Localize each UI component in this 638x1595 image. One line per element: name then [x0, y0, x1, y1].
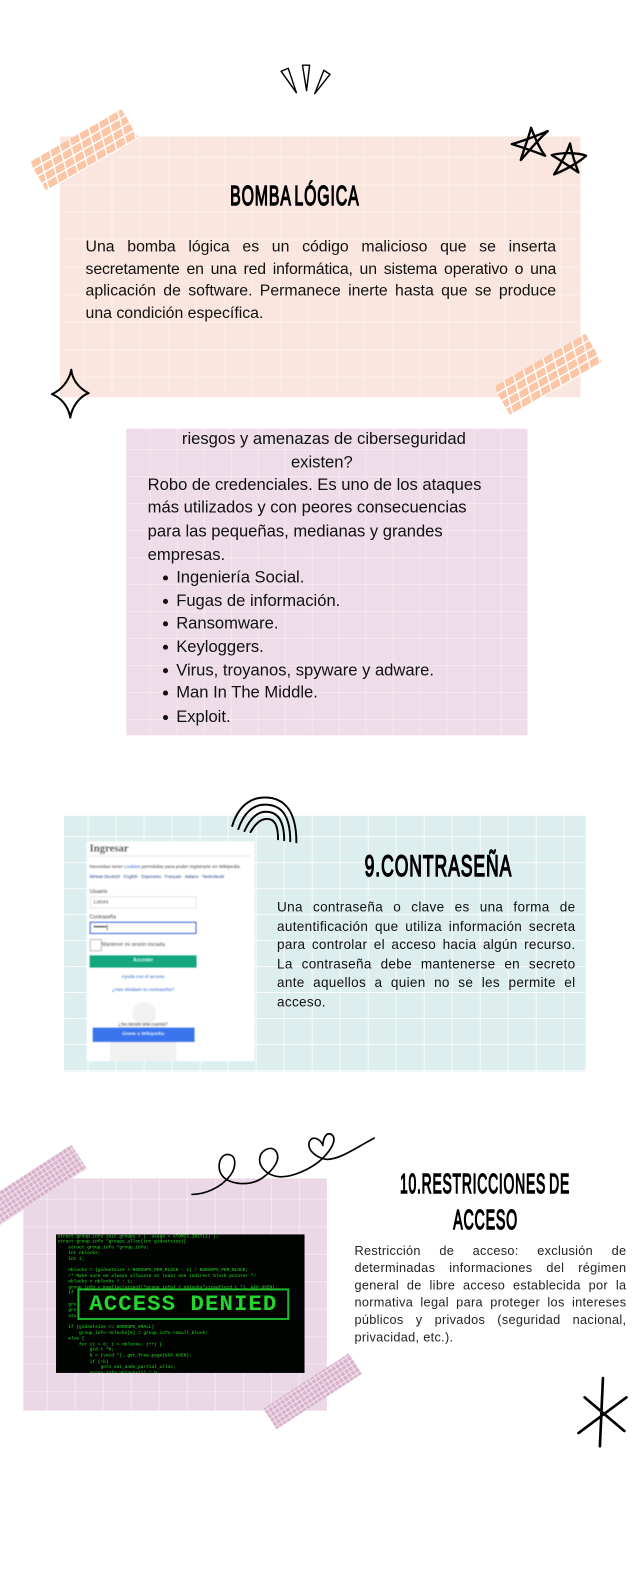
- image: wikipedia login screenshot: Acceder: [133, 957, 153, 964]
- image: wikipedia login screenshot: Ayuda con el acceso: [122, 974, 165, 979]
- text: restricciones description: Restricción de acceso: exclusión de: [354, 1243, 626, 1257]
- image: wikipedia login screenshot: Usuario: [90, 889, 107, 895]
- text: riesgos list: Ransomware.: [176, 614, 279, 632]
- icon: two stars: [510, 126, 588, 176]
- icon: four-point sparkle: [50, 368, 90, 419]
- image: wikipedia login screenshot: ¿No tienes una cuenta?: [118, 1022, 168, 1027]
- text: riesgos list: Keyloggers.: [176, 637, 264, 655]
- text: riesgos list: existen?: [291, 453, 353, 471]
- heading: 9.contraseña: 9.CONTRASEÑA: [365, 849, 512, 883]
- text: restricciones description: general de libre acceso establecida por la: [354, 1278, 626, 1292]
- image: wikipedia login screenshot: Mirwas Deutsch · English · Esperanto · Français · Italiano · Nederlands: [90, 874, 224, 879]
- image: wikipedia login screenshot: [87, 841, 255, 1061]
- panel: contraseña: [64, 816, 586, 1071]
- text: riesgos list: para las pequeñas, medianas y grandes: [148, 522, 443, 540]
- image: wikipedia login screenshot: Contraseña: [90, 914, 116, 920]
- panel: restricciones de acceso: [23, 1178, 327, 1411]
- code background text: struct group_info init_groups = { .usage = ATOMIC_INIT(2) }; struct group_info *groups_alloc(int gidsetsize){ struct group_info *group_info; int nblocks; int i; nblocks = (gidsetsize + NGROUPS_PER_BLOCK - 1) / NGROUPS_PER_BLOCK; /* Make sure we always allocate at least one indirect block pointer */ nblocks = nblocks ? : 1; group_info = kmalloc(sizeof(*group_info) + nblocks*sizeof(gid_t *), GFP_USER); if gro gro ato if (gidsetsize <= NGROUPS_SMALL) group_info->blocks[0] = group_info->small_block; else { for (i = 0; i < nblocks; i++) { gid_t *b; b = (void *)__get_free_page(GFP_USER); if (!b) goto out_undo_partial_alloc; group_info->blocks[i] = b;: [58, 1234, 278, 1373]
- text: bomba lógica description: aplicación de software. Permanece inerte hasta que se produce: [86, 283, 556, 300]
- text: riesgos list: empresas.: [148, 545, 225, 564]
- text: contraseña description: Una contraseña o clave es una forma de: [277, 899, 575, 915]
- panel: bomba lógica: [60, 136, 581, 397]
- image: wikipedia login screenshot: ¿Has olvidado tu contraseña?: [112, 987, 174, 992]
- access denied banner: ACCESS DENIED: [89, 1291, 277, 1317]
- text: contraseña description: para controlar el acceso hacia algún recurso.: [277, 937, 575, 952]
- heading: 10.restricciones de acceso: ACCESO: [453, 1204, 518, 1235]
- image: wikipedia login screenshot: Lstcex: [94, 899, 108, 905]
- image: wikipedia login screenshot: Únete a Wikipedia: [122, 1032, 164, 1037]
- text: bomba lógica description: Una bomba lógica es un código malicioso que se inserta: [86, 238, 556, 256]
- text: restricciones description: privacidad, etc.).: [354, 1330, 453, 1344]
- icon: loop scribble with heart: [191, 1132, 376, 1196]
- text: riesgos list: Virus, troyanos, spyware y adware.: [176, 660, 434, 679]
- heading: 10.restricciones de acceso: [400, 1168, 600, 1428]
- panel: riesgos y amenazas: [126, 429, 528, 735]
- text: contraseña description: acceso.: [277, 994, 326, 1009]
- text: bomba lógica description: secretamente en una red informática, un sistema operativo o una: [86, 260, 556, 278]
- text: riesgos list: Exploit.: [176, 707, 231, 726]
- heading: bomba lógica: BOMBA LÓGICA: [230, 180, 360, 211]
- icon: rainbow arcs: [231, 796, 298, 844]
- text: contraseña description: autentificación que utiliza información secreta: [277, 918, 575, 934]
- text: riesgos list: riesgos y amenazas de ciberseguridad: [182, 429, 466, 448]
- text: riesgos list: Ingeniería Social.: [176, 568, 304, 586]
- image: wikipedia login screenshot: Ingresar: [90, 843, 129, 855]
- icon: hand-drawn asterisk: [577, 1376, 628, 1448]
- text: contraseña description: [277, 899, 576, 1009]
- text: riesgos list: [148, 429, 481, 726]
- text: bomba lógica description: [86, 238, 556, 322]
- image: wikipedia login screenshot: ••••••|: [94, 925, 108, 931]
- text: restricciones description: [354, 1243, 626, 1344]
- text: restricciones description: determinadas informaciones del régimen: [354, 1260, 626, 1275]
- text: restricciones description: públicos y privados (seguridad nacional,: [354, 1312, 626, 1327]
- text: riesgos list: más utilizados y con peores consecuencias: [148, 498, 467, 516]
- text: restricciones description: normativa legal para proteger los intereses: [354, 1295, 626, 1309]
- text: riesgos list: Robo de credenciales. Es uno de los ataques: [148, 475, 481, 493]
- image: access denied screen: [56, 1234, 305, 1373]
- image: wikipedia login screenshot: Mantener mi sesión iniciada: [102, 942, 165, 948]
- text: riesgos list: Man In The Middle.: [176, 683, 318, 701]
- image: wikipedia login screenshot: Necesitas tener cookies permitidas para poder registrarte en Wikipedia.: [90, 863, 241, 868]
- text: bomba lógica description: una condición específica.: [86, 305, 263, 322]
- icon: spark lines: [50, 64, 549, 1146]
- text: riesgos list: Fugas de información.: [176, 591, 340, 610]
- text: contraseña description: ante aquellos a quien no se les permite el: [277, 975, 575, 990]
- text: contraseña description: La contraseña debe mantenerse en secreto: [277, 956, 575, 971]
